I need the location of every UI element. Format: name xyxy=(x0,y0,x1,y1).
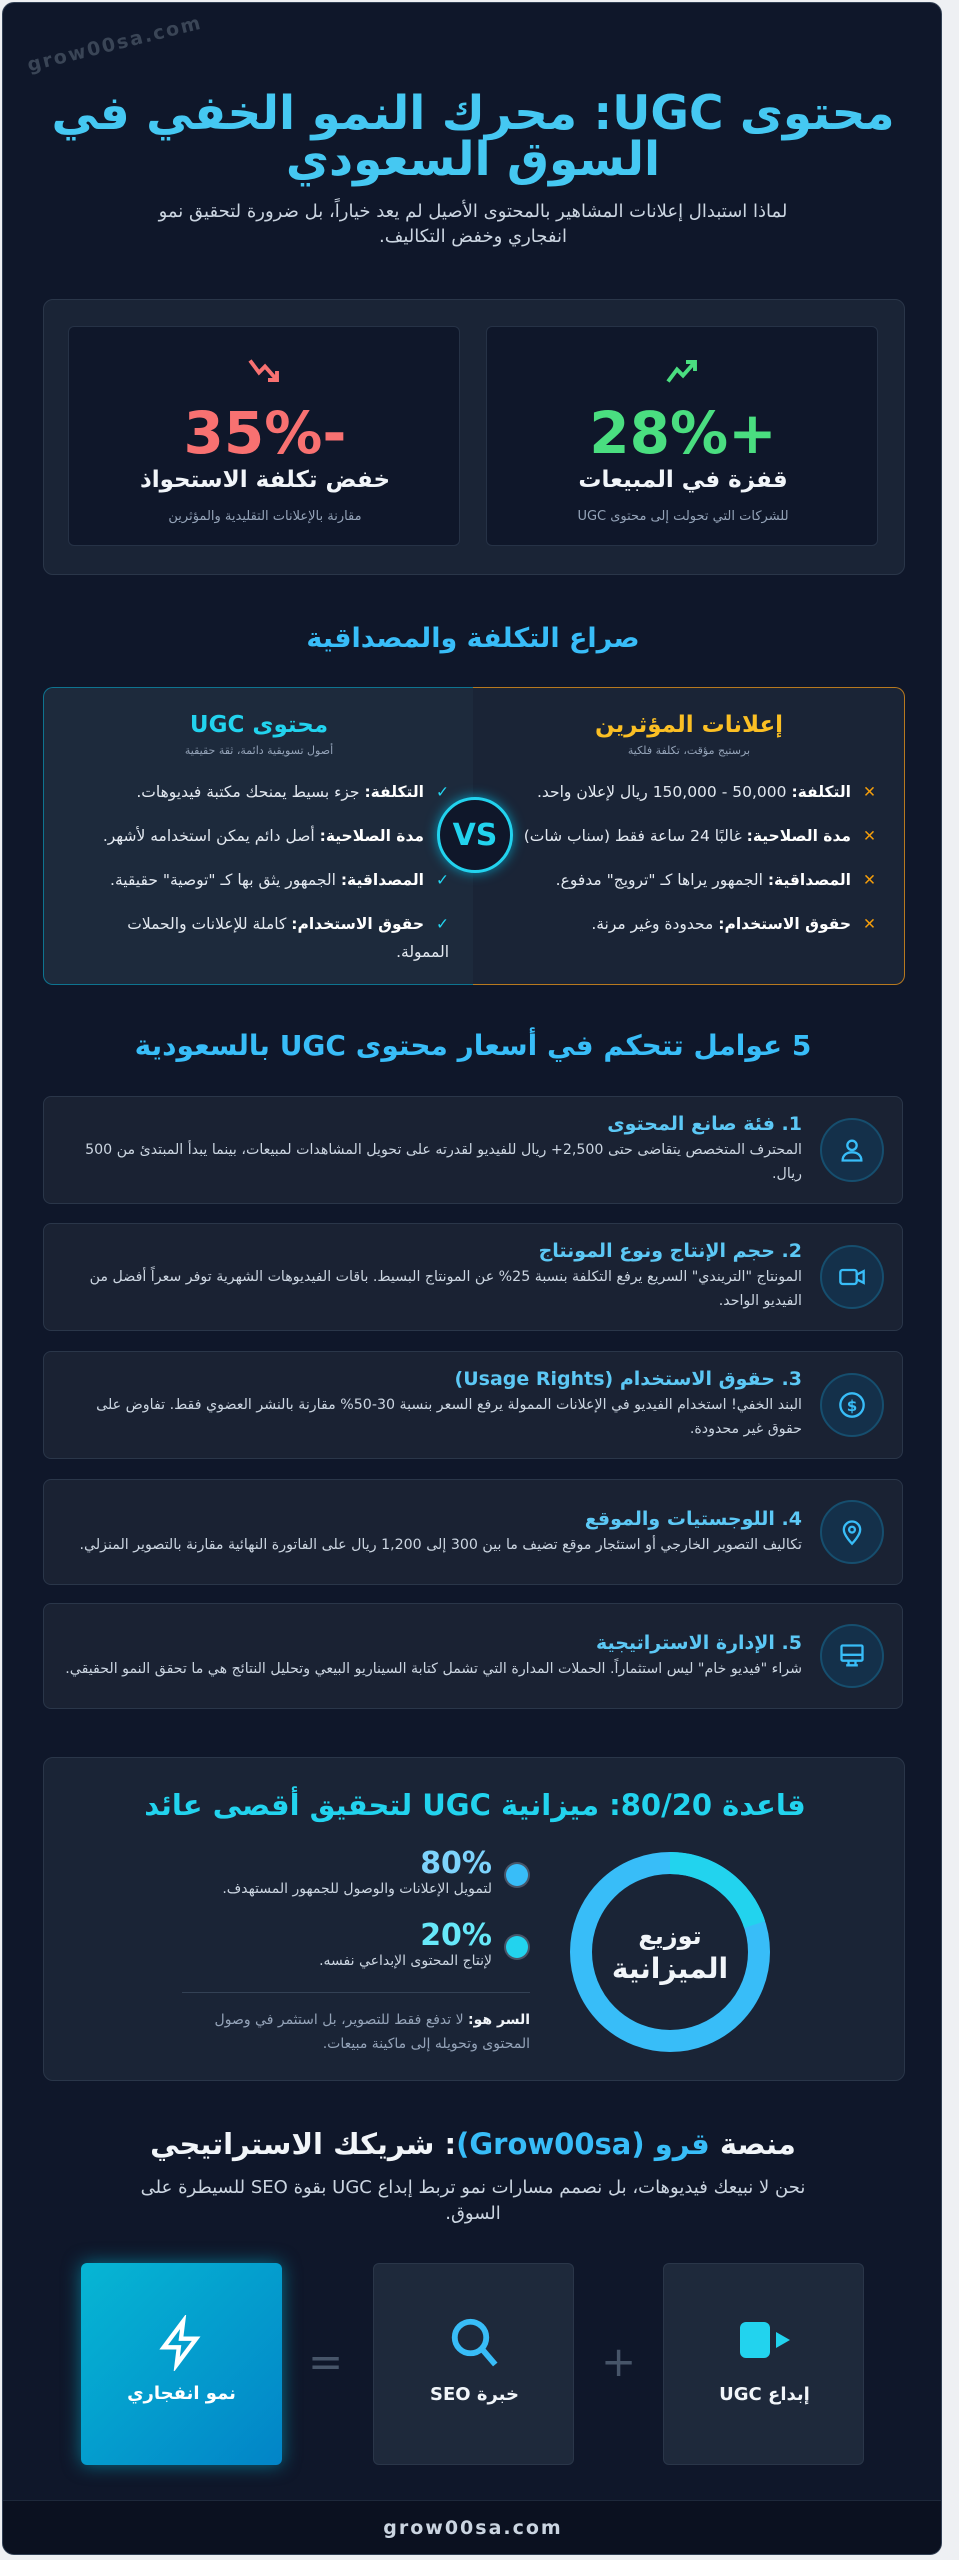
box: explosive growth xyxy=(81,2263,282,2465)
factor 5: 5. الإدارة الاستراتيجية xyxy=(596,1632,802,1654)
legend: 20%: 20% xyxy=(420,1918,492,1953)
heading: 5 factors: 5 عوامل تتحكم في أسعار محتوى UGC بالسعودية xyxy=(135,1029,811,1062)
box: SEO xyxy=(373,2263,574,2465)
chart: donut: توزيع xyxy=(638,1922,702,1950)
column: UGC: ✓مدة الصلاحية: أصل دائم يمكن استخدامه لأشهر. xyxy=(103,827,449,845)
factor 4: 4. اللوجستيات والموقع xyxy=(585,1508,802,1530)
column: UGC: ✓حقوق الاستخدام: كاملة للإعلانات والحملات الممولة. xyxy=(127,915,449,961)
footer xyxy=(3,2500,943,2556)
column: UGC: أصول تسويقية دائمة، ثقة حقيقية xyxy=(185,744,333,757)
legend: 80%: 80% xyxy=(420,1846,492,1881)
badge: VS: VS xyxy=(453,818,497,852)
factor 5: شراء "فيديو خام" ليس استثماراً. الحملات المدارة التي تشمل كتابة السيناريو البيعي وتحليل النتائج هي ما تحقق النمو الحقيقي. xyxy=(65,1661,802,1677)
panel: comparison xyxy=(43,687,905,985)
panel: stats xyxy=(43,299,905,575)
icon: video xyxy=(740,2322,790,2358)
factor 3 xyxy=(43,1351,903,1459)
heading: Grow00sa: منصة قرو (Grow00sa): شريكك الاستراتيجي xyxy=(150,2127,796,2161)
note: مقارنة بالإعلانات التقليدية والمؤثرين xyxy=(168,509,362,524)
factor 4: تكاليف التصوير الخارجي أو استئجار موقع تضيف ما بين 300 إلى 1,200 ريال على الفاتورة النهائية مقارنة بالتصوير المنزلي. xyxy=(79,1537,802,1553)
column: UGC xyxy=(43,687,473,985)
icon: dollar xyxy=(820,1373,884,1437)
heading: قاعدة 80/20: ميزانية UGC لتحقيق أقصى عائد xyxy=(144,1788,806,1822)
chart: donut xyxy=(570,1852,770,2052)
legend: 20% xyxy=(319,1918,530,1969)
chart: donut: الميزانية xyxy=(612,1952,728,1985)
factor 5 xyxy=(43,1603,903,1709)
icon: search xyxy=(452,2318,498,2366)
factor 2: المونتاج "التريندي" السريع يرفع التكلفة بنسبة 25% عن المونتاج البسيط. باقات الفيديوهات الشهرية توفر سعراً أفضل من الفيديو الواحد. xyxy=(90,1269,802,1309)
column: influencers: ✕التكلفة: 50,000 - 150,000 ريال لإعلان واحد. xyxy=(537,783,876,801)
factor 3: 3. حقوق الاستخدام (Usage Rights) xyxy=(455,1368,802,1390)
title: محتوى UGC: محرك النمو الخفي في السوق السعودي xyxy=(51,86,895,187)
box: SEO: خبرة SEO xyxy=(430,2384,519,2405)
factor 2: 2. حجم الإنتاج ونوع المونتاج xyxy=(539,1240,802,1262)
text: partner description: نحن لا نبيعك فيديوهات، بل نصمم مسارات نمو تربط إبداع UGC بقوة SEO للسيطرة على السوق. xyxy=(141,2177,805,2224)
footer: grow00sa.com xyxy=(383,2517,563,2539)
column: influencers: إعلانات المؤثرين xyxy=(595,712,783,738)
column: UGC: ✓التكلفة: جزء بسيط يمنحك مكتبة فيديوهات. xyxy=(136,783,449,801)
number: 35%- xyxy=(184,399,346,467)
number: 28%+ xyxy=(589,399,777,467)
column: influencers xyxy=(473,687,905,985)
stat card: sales xyxy=(486,326,878,546)
legend: 20%: لإنتاج المحتوى الإبداعي نفسه. xyxy=(319,1953,492,1969)
icon: lightning xyxy=(159,2315,200,2371)
legend: 80% xyxy=(222,1846,530,1897)
factor 1: المحترف المتخصص يتقاضى حتى 2,500+ ريال للفيديو لقدرته على تحويل المشاهدات لمبيعات، بينما يبدأ المبتدئ من 500 ريال. xyxy=(85,1142,802,1182)
stat card: cost xyxy=(68,326,460,546)
watermark: grow00sa.com xyxy=(25,12,204,76)
label: خفض تكلفة الاستحواذ xyxy=(140,467,390,493)
factor 2 xyxy=(43,1223,903,1331)
box: explosive growth: نمو انفجاري xyxy=(127,2383,236,2404)
factor 1 xyxy=(43,1096,903,1204)
icon: video xyxy=(820,1245,884,1309)
subtitle: لماذا استبدال إعلانات المشاهير بالمحتوى الأصيل لم يعد خياراً، بل ضرورة لتحقيق نمو انفجاري وخفض التكاليف. xyxy=(159,201,787,247)
column: influencers: برستيج مؤقت، تكلفة فلكية xyxy=(628,744,750,757)
icon: pin xyxy=(820,1500,884,1564)
column: influencers: ✕المصداقية: الجمهور يراها كـ "ترويج" مدفوع. xyxy=(556,871,876,889)
icon: user xyxy=(820,1118,884,1182)
panel: budget 80/20 xyxy=(43,1757,905,2081)
column: UGC: ✓المصداقية: الجمهور يثق بها كـ "توصية" حقيقية. xyxy=(110,871,449,889)
icon: trend up xyxy=(666,360,697,383)
symbol: plus: + xyxy=(601,2337,636,2386)
icon: monitor xyxy=(820,1624,884,1688)
factor 1: 1. فئة صانع المحتوى xyxy=(607,1113,802,1135)
label: قفزة في المبيعات xyxy=(578,467,788,493)
box: UGC creativity: إبداع UGC xyxy=(719,2384,810,2405)
symbol: equals: = xyxy=(308,2337,343,2386)
column: UGC: محتوى UGC xyxy=(190,712,328,738)
badge: VS xyxy=(437,797,513,873)
factor 3: البند الخفي! استخدام الفيديو في الإعلانات الممولة يرفع السعر بنسبة 30-50% مقارنة بالنشر العضوي فقط. تفاوض على حقوق غير محدودة. xyxy=(96,1397,802,1437)
heading: cost vs credibility: صراع التكلفة والمصداقية xyxy=(306,623,640,654)
column: influencers: ✕مدة الصلاحية: غالبًا 24 ساعة فقط (سناب شات) xyxy=(524,827,876,845)
note: للشركات التي تحولت إلى محتوى UGC xyxy=(577,509,789,524)
factor 4 xyxy=(43,1479,903,1585)
note: secret: السر هو: لا تدفع فقط للتصوير، بل استثمر في وصول المحتوى وتحويله إلى ماكينة مبيعات. xyxy=(215,2012,530,2052)
column: influencers: ✕حقوق الاستخدام: محدودة وغير مرنة. xyxy=(591,915,876,933)
icon: dollar: $ xyxy=(847,1397,857,1415)
icon: trend down xyxy=(248,359,279,382)
box: UGC creativity xyxy=(663,2263,864,2465)
legend: 80%: لتمويل الإعلانات والوصول للجمهور المستهدف. xyxy=(222,1881,492,1897)
